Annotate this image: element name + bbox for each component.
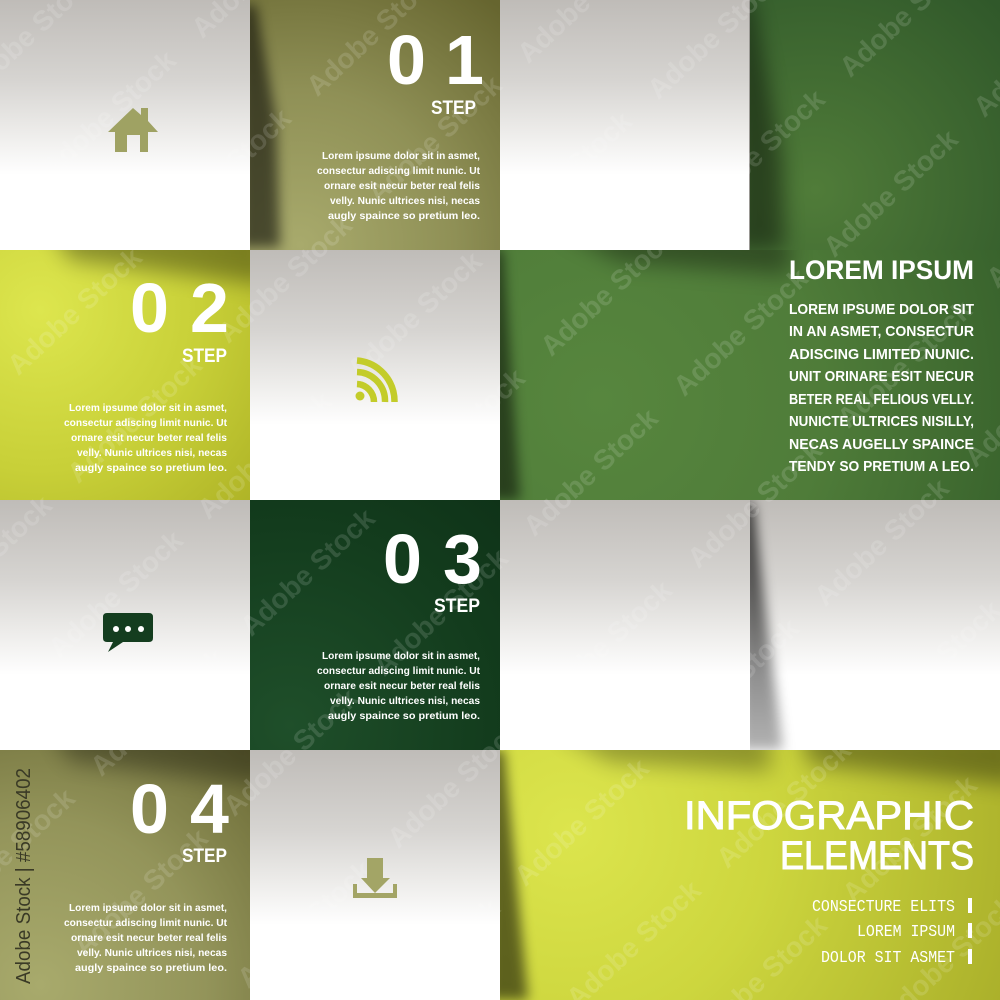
watermark pattern: Adobe Stock: [658, 612, 805, 752]
step 02 number: 0: [130, 269, 169, 347]
text block: lorem ipsum paragraph: ADISCING LIMITED NUNIC.: [789, 346, 974, 363]
step 02 body text: [64, 402, 227, 474]
step 02 body text: Lorem ipsume dolor sit in asmet,: [69, 402, 227, 414]
step 01 label: STEP: [431, 98, 476, 119]
panel: white tile row three right: [740, 500, 1000, 750]
text block: lorem ipsum paragraph: IN AN ASMET, CONSECTUR: [789, 323, 974, 340]
watermark pattern: Adobe Stock: [667, 262, 814, 402]
step 03 body text: ornare esit necur beter real felis: [324, 680, 480, 692]
watermark pattern: Adobe Stock: [361, 69, 508, 209]
watermark pattern: Adobe Stock: [150, 102, 297, 242]
step 03 block: [317, 520, 482, 722]
step 04 label: STEP: [182, 846, 227, 867]
watermark pattern: Adobe Stock: [817, 123, 964, 263]
watermark pattern: Adobe Stock: [231, 854, 378, 994]
step 02 number: [130, 269, 229, 347]
watermark pattern: Adobe Stock: [384, 362, 531, 502]
text block: lorem ipsum paragraph: NUNICTE ULTRICES NISILLY,: [789, 413, 974, 430]
step 04 number: [130, 770, 229, 848]
step 04 body text: velly. Nunic ultrices nisi, necas: [77, 947, 227, 959]
step 01 body text: velly. Nunic ultrices nisi, necas: [330, 195, 480, 207]
title: infographic elements: INFOGRAPHIC: [684, 794, 974, 838]
text block: lorem ipsum paragraph: [789, 301, 974, 475]
watermark pattern: Adobe Stock: [808, 472, 955, 612]
step 01 number: [387, 21, 484, 99]
step 01 body text: augly spaince so pretium leo.: [328, 210, 480, 222]
watermark pattern: Adobe Stock: [831, 294, 978, 434]
step 04 number: 0: [130, 770, 169, 848]
step 04 block: [64, 770, 229, 974]
step 04 body text: augly spaince so pretium leo.: [75, 962, 227, 974]
panel: white tile row three left: [0, 500, 250, 750]
step 03 number: 0: [383, 520, 422, 598]
step 01 number: 1: [445, 21, 484, 99]
watermark pattern: Adobe Stock: [1, 241, 148, 381]
watermark pattern: Adobe Stock: [35, 44, 182, 184]
panel: white tile centre: [250, 250, 500, 500]
step 04 body text: [64, 902, 227, 974]
panel: white tile row three: [500, 500, 750, 750]
list: bottom right labels: CONSECTURE ELITS: [812, 898, 955, 917]
step 02 body text: ornare esit necur beter real felis: [71, 432, 227, 444]
list: bottom right labels: LOREM IPSUM: [857, 923, 955, 942]
panel: step 04 olive tile: [0, 750, 250, 1000]
watermark pattern: Adobe Stock: [517, 402, 664, 542]
step 02 block: [64, 269, 229, 474]
step 04 body text: Lorem ipsume dolor sit in asmet,: [69, 902, 227, 914]
watermark pattern: Adobe Stock: [61, 349, 208, 489]
heading: lorem ipsum: LOREM IPSUM: [789, 255, 974, 285]
step 02 number: 2: [190, 269, 229, 347]
watermark pattern: Adobe Stock: [508, 752, 655, 892]
step 01 body text: [317, 150, 480, 222]
text block: lorem ipsum paragraph: LOREM IPSUME DOLOR SIT: [789, 301, 974, 318]
panel: wide green tile: [488, 230, 1000, 500]
step 04 body text: ornare esit necur beter real felis: [71, 932, 227, 944]
text block: lorem ipsum paragraph: UNIT ORINARE ESIT NECUR: [789, 368, 974, 385]
panel: white tile top: [500, 0, 750, 250]
step 02 body text: consectur adiscing limit nunic. Ut: [64, 417, 227, 429]
step 03 body text: augly spaince so pretium leo.: [328, 710, 480, 722]
step 02 body text: velly. Nunic ultrices nisi, necas: [77, 447, 227, 459]
watermark pattern: Adobe Stock: [836, 769, 983, 909]
step 01 body text: ornare esit necur beter real felis: [324, 180, 480, 192]
watermark pattern: Adobe Stock: [367, 542, 514, 682]
watermark pattern: Adobe Stock: [211, 209, 358, 349]
watermark pattern: Adobe Stock: [234, 502, 381, 642]
title: infographic elements: ELEMENTS: [780, 834, 974, 878]
icon: rss signal: [356, 360, 395, 402]
panel: dark green tile top right: [735, 0, 1000, 250]
list: bottom right labels: DOLOR SIT ASMET: [821, 949, 955, 968]
text block: lorem ipsum paragraph: TENDY SO PRETIUM A LEO.: [789, 458, 974, 475]
watermark pattern: Adobe Stock: [491, 105, 638, 245]
step 03 body text: [317, 650, 480, 722]
watermark pattern: Adobe Stock: [217, 682, 364, 822]
step 01 body text: consectur adiscing limit nunic. Ut: [317, 165, 480, 177]
step 04 body text: consectur adiscing limit nunic. Ut: [64, 917, 227, 929]
text block: lorem ipsum paragraph: NECAS AUGELLY SPAINCE: [789, 436, 974, 453]
watermark pattern: Adobe Stock: [341, 245, 488, 385]
step 01 number: 0: [387, 21, 426, 99]
panel: step 01 olive tile: [240, 0, 500, 250]
watermark pattern: Adobe Stock: [67, 822, 214, 962]
step 02 label: STEP: [182, 346, 227, 367]
watermark pattern: Adobe Stock: [42, 524, 189, 664]
panel: white tile bottom: [250, 750, 500, 1000]
step 02 body text: augly spaince so pretium leo.: [75, 462, 227, 474]
icon: download: [353, 858, 397, 898]
step 03 body text: velly. Nunic ultrices nisi, necas: [330, 695, 480, 707]
icon: house: [108, 108, 158, 152]
step 03 number: [383, 520, 482, 598]
step 03 body text: consectur adiscing limit nunic. Ut: [317, 665, 480, 677]
icon: chat bubble: [103, 613, 153, 652]
step 03 number: 3: [443, 520, 482, 598]
stock credit vertical text: Adobe Stock | #58906402: [13, 768, 35, 984]
panel: white tile top left: [0, 0, 250, 250]
step 01 body text: Lorem ipsume dolor sit in asmet,: [322, 150, 480, 162]
watermark pattern: Adobe Stock: [681, 434, 828, 574]
watermark pattern: Adobe Stock: [381, 714, 528, 854]
panel: step 02 lime tile: [0, 250, 250, 500]
watermark pattern: Adobe Stock: [534, 222, 681, 362]
watermark pattern: Adobe Stock: [710, 734, 857, 874]
watermark pattern: Adobe Stock: [84, 642, 231, 782]
step 03 body text: Lorem ipsume dolor sit in asmet,: [322, 650, 480, 662]
step 03 label: STEP: [434, 596, 480, 617]
watermark pattern: Adobe Stock: [531, 574, 678, 714]
step 01 block: [317, 21, 484, 222]
watermark pattern: Adobe Stock: [684, 83, 831, 223]
list: bottom right labels: [812, 898, 972, 968]
title: infographic elements: [684, 794, 974, 878]
watermark pattern: Adobe Stock: [191, 385, 338, 525]
step 04 number: 4: [190, 770, 229, 848]
panel: step 03 dark green tile: [250, 500, 500, 750]
panel: wide lime tile: [488, 730, 1000, 1000]
